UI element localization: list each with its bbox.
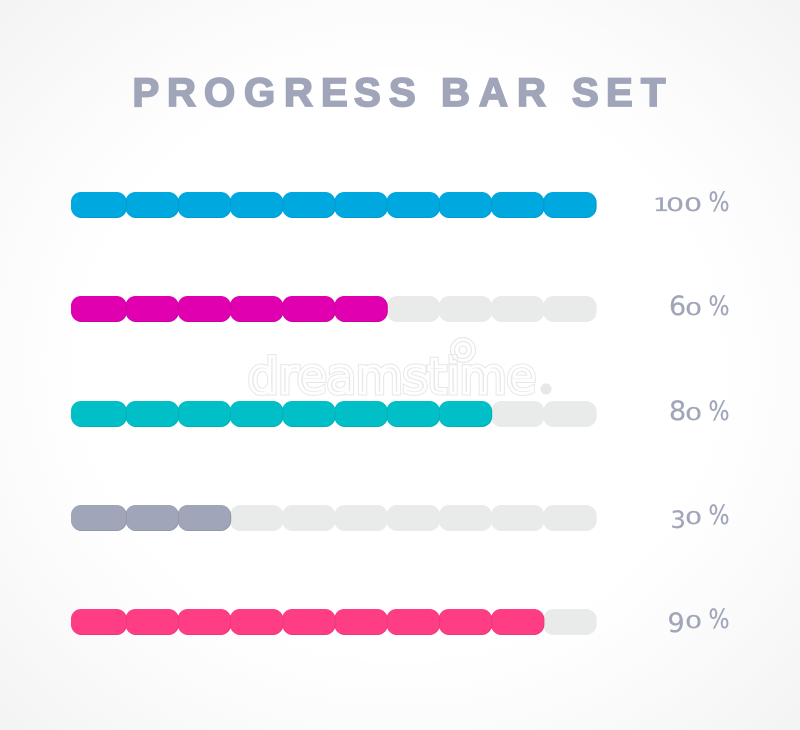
label: 30%: % — [708, 499, 730, 531]
label: 60%: 0 — [685, 299, 702, 320]
label: 100%: % — [708, 186, 730, 218]
progress bar: 100% — [71, 192, 597, 218]
label: 90% — [668, 603, 730, 639]
label: 30% — [670, 499, 730, 534]
label: 60%: % — [708, 290, 730, 322]
label: 100%: 0 — [666, 194, 684, 216]
label: 80%: % — [708, 395, 730, 427]
progress bar: 80% — [71, 401, 597, 427]
label: 100% — [653, 186, 730, 218]
watermark: dreamstime — [248, 349, 536, 405]
label: 30%: 3 — [670, 506, 686, 534]
label: 80%: 8 — [669, 396, 686, 427]
label: 100%: 0 — [684, 194, 702, 216]
progress bar: 90% — [71, 609, 597, 635]
label: 90%: % — [708, 603, 730, 635]
label: 80% — [669, 395, 730, 427]
label: 80%: 0 — [685, 404, 702, 425]
label: 30%: 0 — [685, 508, 702, 529]
progress bar: 30% — [71, 505, 597, 531]
progress bar: 60% — [71, 296, 597, 322]
label: 60% — [669, 290, 730, 322]
percentage labels — [653, 186, 730, 639]
label: 90%: 9 — [668, 608, 685, 639]
label: 60%: 6 — [669, 291, 686, 322]
label: 100%: 1 — [653, 194, 669, 216]
watermark: dreamstime — [248, 349, 536, 405]
title: PROGRESS BAR SET — [132, 71, 665, 115]
label: 90%: 0 — [685, 612, 702, 633]
